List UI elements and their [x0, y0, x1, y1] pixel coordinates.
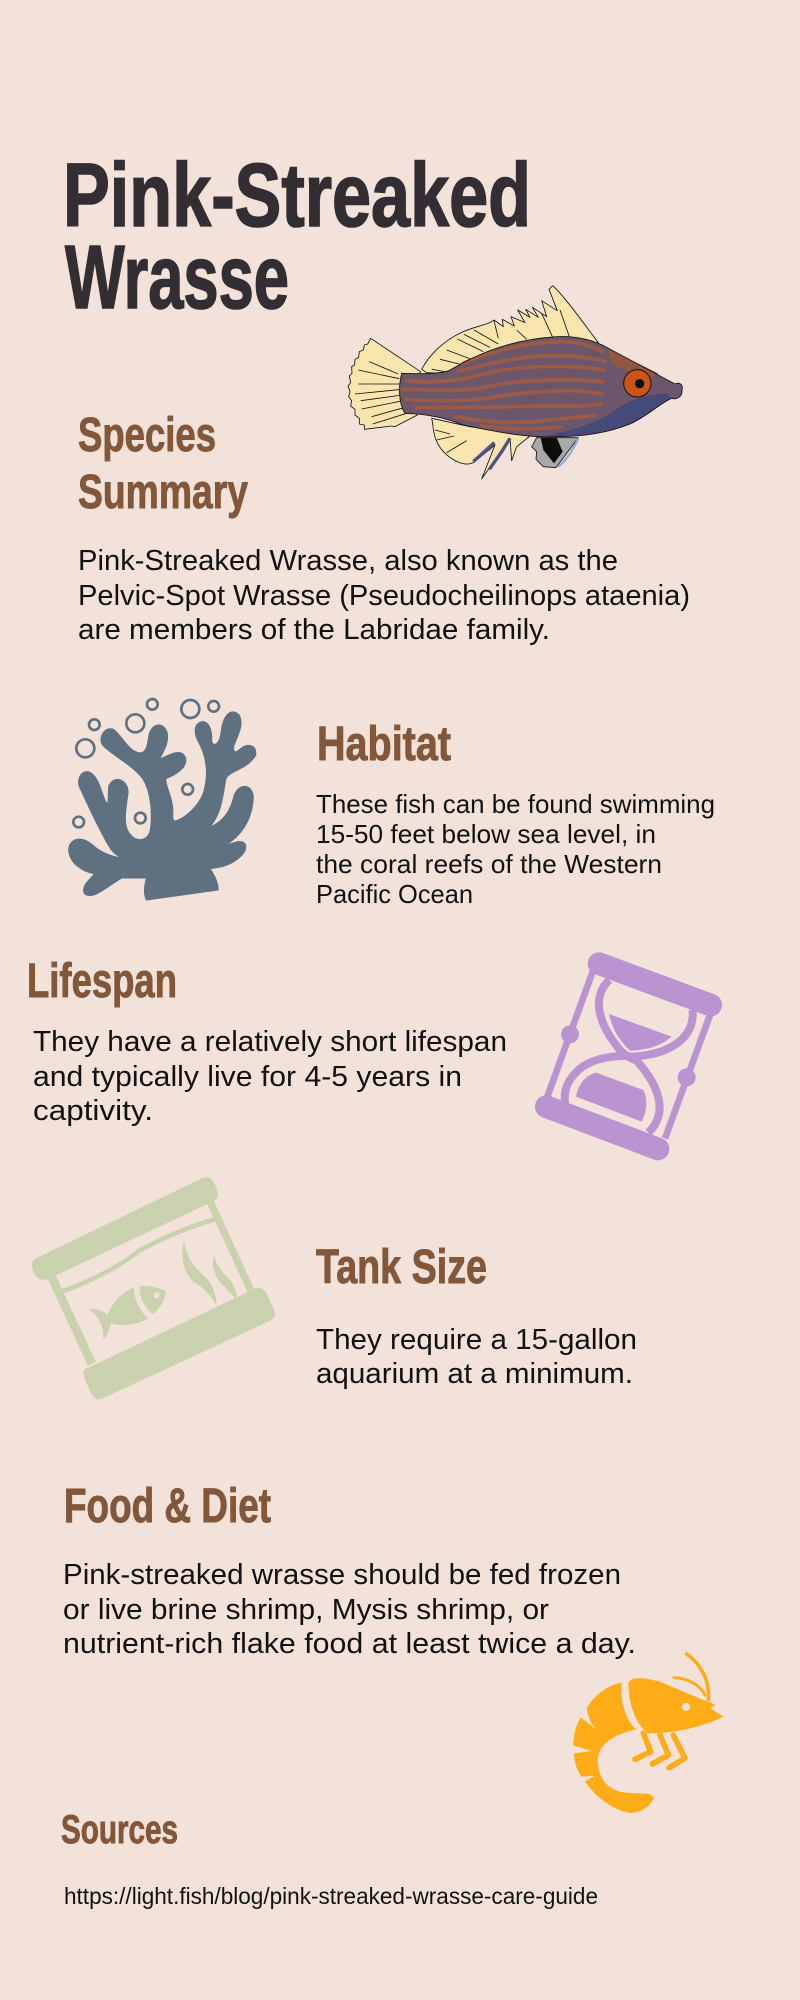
heading: habitat: Habitat	[317, 718, 451, 771]
icon: coral	[69, 699, 255, 899]
title: Pink-Streaked	[63, 146, 531, 246]
text: food and diet: nutrient-rich flake food at least twice a day.	[63, 1628, 636, 1660]
text: habitat: Pacific Ocean	[316, 879, 473, 909]
text: lifespan: They have a relatively short lifespan	[33, 1026, 507, 1058]
text: species summary: Pink-Streaked Wrasse, also known as the	[78, 545, 618, 577]
title	[63, 146, 531, 328]
icon: shrimp	[573, 1654, 723, 1813]
heading: species summary: Species	[78, 409, 216, 462]
panel: species summary	[78, 409, 690, 646]
text: food and diet	[63, 1559, 636, 1660]
text: habitat: These fish can be found swimming	[316, 789, 715, 819]
heading: tank size: Tank Size	[316, 1241, 487, 1294]
panel: tank size	[316, 1241, 637, 1390]
text: habitat: the coral reefs of the Western	[316, 849, 662, 879]
text: tank size	[316, 1324, 637, 1390]
text: lifespan	[33, 1026, 507, 1127]
text: food and diet: or live brine shrimp, Mysis shrimp, or	[63, 1594, 549, 1626]
text: species summary: Pelvic-Spot Wrasse (Pseudocheilinops ataenia)	[78, 580, 690, 612]
text: source url: https://light.fish/blog/pink-streaked-wrasse-care-guide	[64, 1883, 598, 1909]
heading: food and diet: Food & Diet	[64, 1480, 271, 1533]
text: species summary	[78, 545, 690, 646]
text: lifespan: and typically live for 4-5 years in	[33, 1061, 462, 1093]
heading: species summary: Summary	[78, 466, 248, 519]
panel: habitat	[316, 718, 715, 909]
icon: aquarium tank	[33, 1178, 274, 1399]
panel: sources	[61, 1808, 598, 1909]
text: habitat: 15-50 feet below sea level, in	[316, 819, 656, 849]
icon: wrasse fish	[348, 286, 682, 479]
text: habitat	[316, 789, 715, 909]
heading: sources: Sources	[61, 1808, 178, 1852]
text: species summary: are members of the Labridae family.	[78, 614, 550, 646]
heading: lifespan: Lifespan	[27, 955, 177, 1008]
text: lifespan: captivity.	[33, 1095, 153, 1127]
text: tank size: They require a 15-gallon	[316, 1324, 637, 1356]
title: Wrasse	[65, 228, 289, 328]
text: food and diet: Pink-streaked wrasse should be fed frozen	[63, 1559, 621, 1591]
heading: species summary	[78, 409, 248, 519]
panel: food and diet	[63, 1480, 636, 1660]
icon: hourglass	[546, 964, 711, 1149]
panel: lifespan	[27, 955, 507, 1127]
text: tank size: aquarium at a minimum.	[316, 1358, 633, 1390]
